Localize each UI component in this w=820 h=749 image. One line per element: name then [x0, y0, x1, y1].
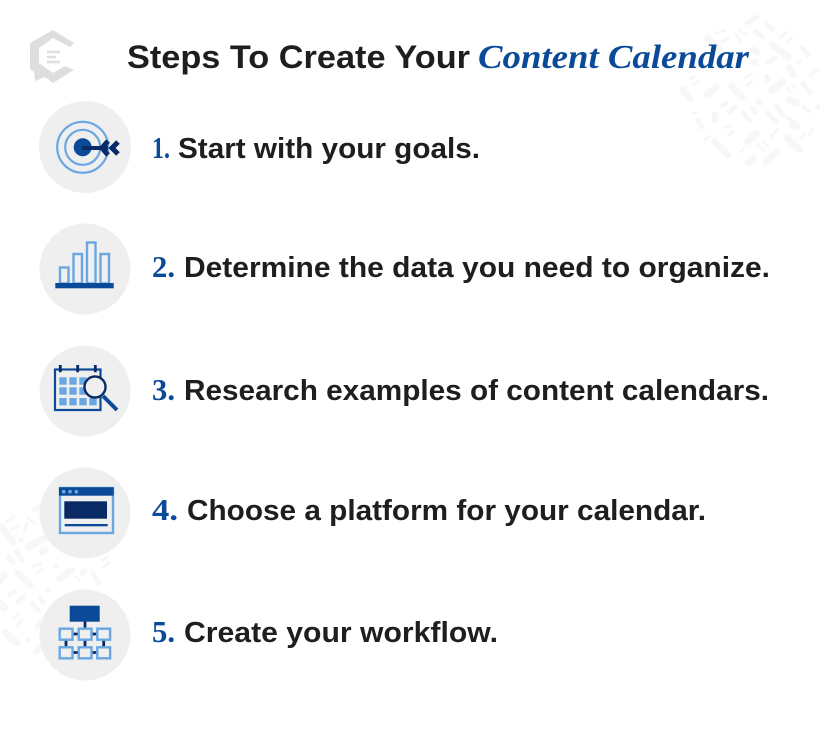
step 4 text: 4.	[152, 492, 178, 527]
step 5	[40, 590, 498, 680]
logo	[30, 30, 74, 83]
step 3 text: 3.	[152, 372, 175, 407]
step 5 text: Create your workflow.	[184, 617, 498, 649]
icon: calendar with magnifier	[40, 346, 130, 436]
step 1	[39, 101, 480, 193]
step 3 text: Research examples of content calendars.	[184, 375, 769, 407]
step 1 text: 1.	[152, 130, 170, 165]
title: Content Calendar	[478, 39, 750, 76]
step 4 text: Choose a platform for your calendar.	[187, 495, 706, 527]
step 2 text: Determine the data you need to organize.	[184, 252, 770, 284]
step 4	[40, 468, 706, 558]
step 1 text: Start with your goals.	[178, 133, 480, 165]
step 5 text: 5.	[152, 614, 175, 649]
icon: workflow chart	[40, 590, 130, 680]
icon: bar chart	[40, 224, 130, 314]
icon: target with arrow	[39, 101, 131, 193]
title: Steps To Create Your	[127, 39, 470, 75]
step 3	[40, 346, 769, 436]
step 2	[40, 224, 770, 314]
icon: browser window	[40, 468, 130, 558]
title	[127, 39, 750, 76]
step 2 text: 2.	[152, 249, 175, 284]
